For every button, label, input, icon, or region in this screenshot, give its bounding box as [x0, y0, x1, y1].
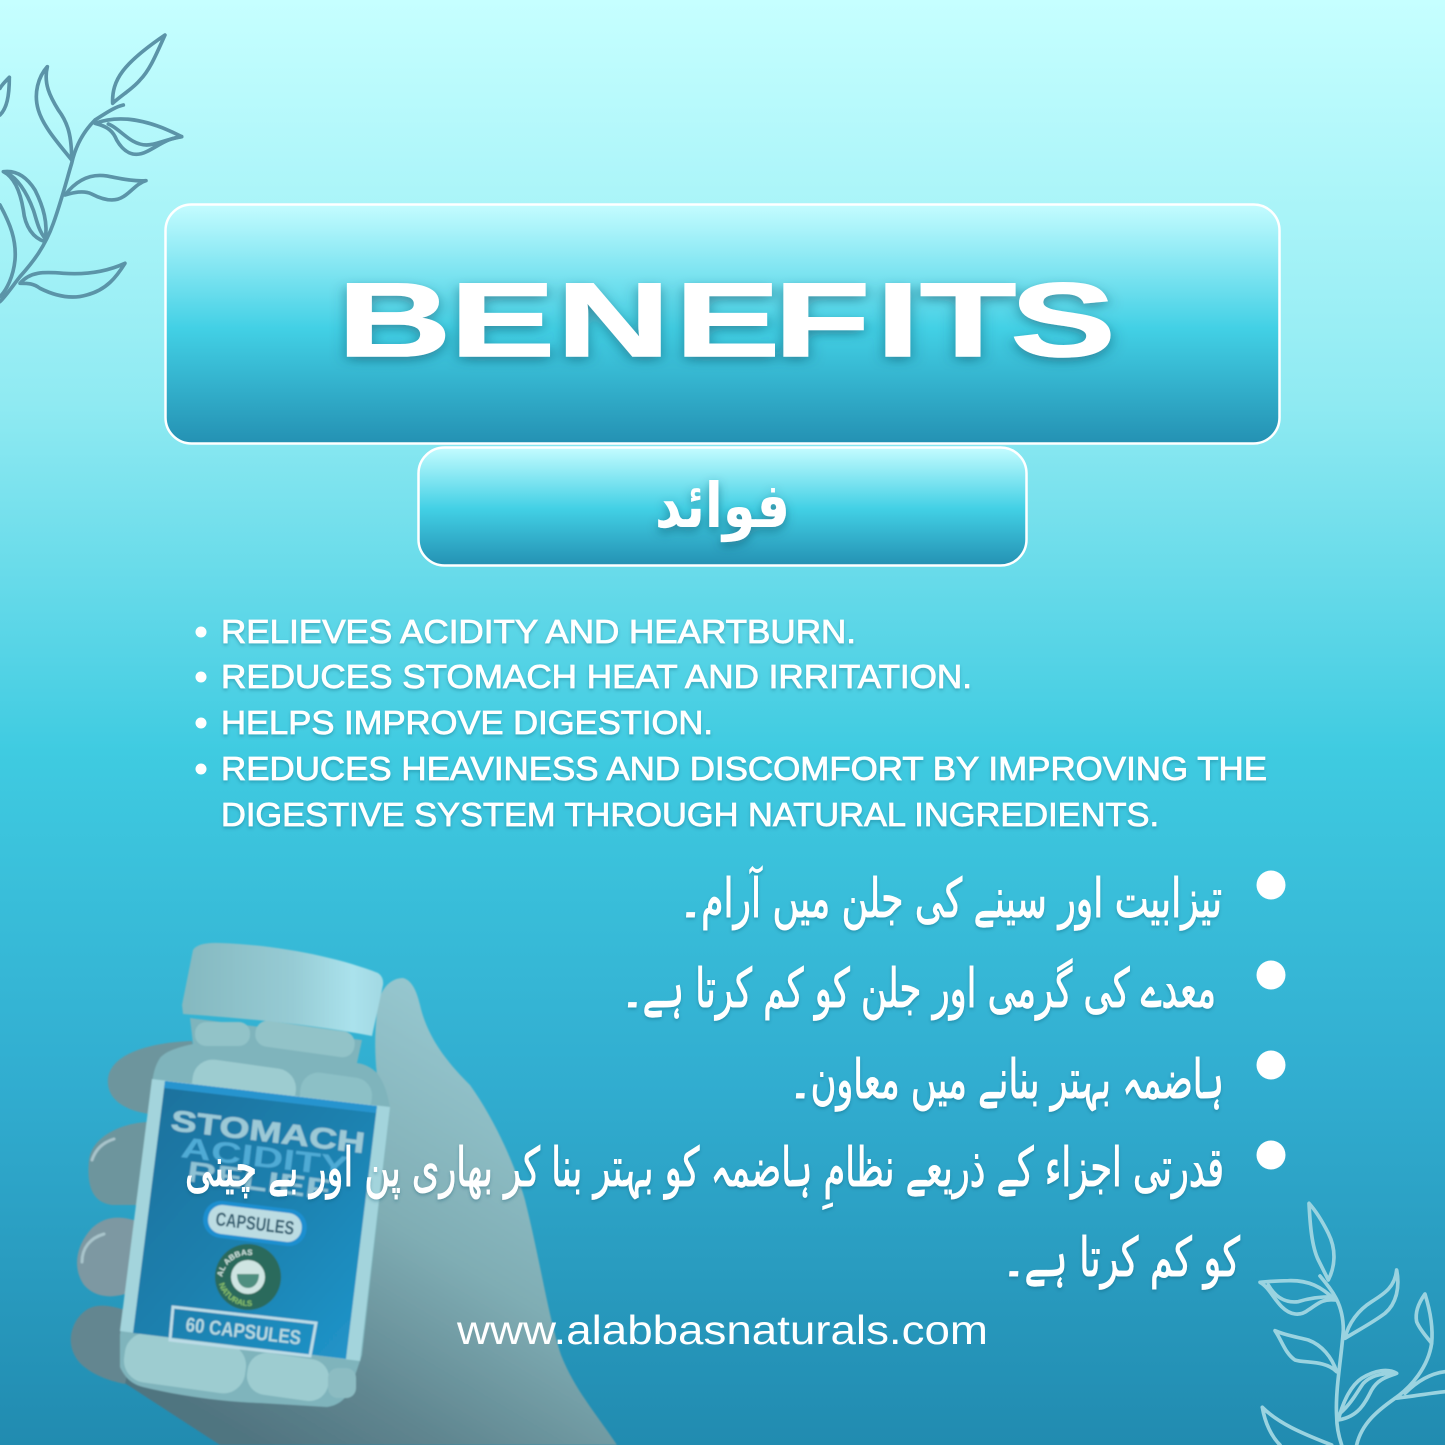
- bullet 3: HELPS IMPROVE DIGESTION.: [221, 704, 713, 741]
- bullet 1: RELIEVES ACIDITY AND HEARTBURN.: [221, 613, 856, 650]
- bullet 2: REDUCES STOMACH HEAT AND IRRITATION.: [221, 658, 972, 695]
- english bullet list: [196, 613, 1267, 833]
- urdu heading: فوائد: [655, 469, 790, 542]
- icon: product bottle held in hand: ACIDITY: [179, 1132, 350, 1184]
- label text: product name: STOMACH: [169, 1105, 367, 1160]
- icon: product bottle held in hand: [70, 942, 618, 1445]
- bottle label: [120, 1079, 390, 1361]
- logo badge: [214, 1243, 282, 1311]
- middle finger: [88, 1122, 150, 1205]
- urdu bullet list: [185, 866, 1286, 1289]
- bullet 4: REDUCES HEAVINESS AND DISCOMFORT BY IMPROVING THE: [221, 750, 1267, 787]
- capsules pill badge: [201, 1199, 309, 1248]
- index finger: [108, 1041, 200, 1114]
- title: BENEFITS: [338, 262, 1116, 379]
- panel: urdu title box: [418, 448, 1026, 566]
- urdu bullet 3: ہاضمہ بہتر بنانے میں معاون۔: [790, 1048, 1224, 1111]
- panel: benefits title box: [166, 204, 1280, 444]
- urdu bullet 4: [185, 1136, 1286, 1289]
- ring finger: [77, 1218, 140, 1296]
- icon: top-left leaf branch: [0, 35, 182, 302]
- website url: www.alabbasnaturals.com: [456, 1307, 988, 1353]
- bullet 4: [196, 750, 1267, 833]
- little finger: [71, 1306, 135, 1384]
- logo badge: NATURALS: [218, 1282, 253, 1307]
- icon: product bottle held in hand: RELIEF: [185, 1156, 332, 1207]
- bottle cap: [182, 943, 383, 1036]
- logo badge: AL ABBAS: [216, 1248, 254, 1278]
- urdu bullet 4: کو کم کرتا ہے۔: [1003, 1226, 1240, 1289]
- nail highlights: [82, 1139, 114, 1262]
- capsules in glass: [121, 1019, 374, 1404]
- icon: bottom-right leaf branch: [1260, 1203, 1445, 1445]
- sixty capsules box: [170, 1307, 316, 1356]
- sixty capsules box: 60 CAPSULES: [184, 1314, 302, 1350]
- bullet 4: DIGESTIVE SYSTEM THROUGH NATURAL INGREDIENTS.: [221, 796, 1159, 833]
- bottle body glass: [120, 1018, 390, 1407]
- hand palm and thumb: [120, 978, 617, 1445]
- capsules pill badge: CAPSULES: [214, 1209, 295, 1240]
